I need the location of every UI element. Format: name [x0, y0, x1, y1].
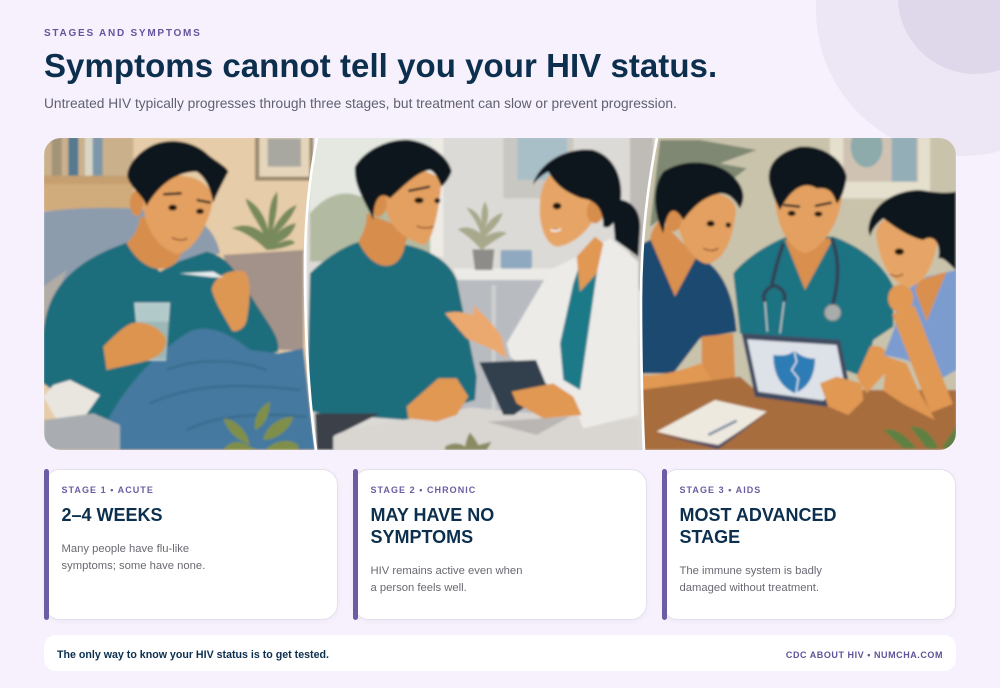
stage description: symptoms; some have none.	[62, 560, 205, 572]
scene: chronic stage, man talks with clinician	[307, 137, 657, 453]
stage description: Many people have flu-like	[62, 543, 189, 555]
kicker: STAGES AND SYMPTOMS	[44, 28, 202, 39]
card: stage 3	[662, 469, 956, 620]
accent bar	[662, 469, 667, 620]
stage description: damaged without treatment.	[680, 582, 819, 594]
stage heading: MAY HAVE NO	[370, 505, 494, 525]
accent bar	[44, 469, 49, 620]
subtitle: Untreated HIV typically progresses through three stages, but treatment can slow or prevent progression.	[44, 96, 677, 111]
sources: CDC ABOUT HIV • NUMCHA.COM	[786, 650, 943, 660]
title: Symptoms cannot tell you your HIV status.	[44, 47, 717, 84]
stage heading	[370, 505, 494, 547]
stage heading: MOST ADVANCED	[680, 505, 836, 525]
illustration: three stage scenes	[44, 138, 956, 450]
card: stage 1	[44, 469, 338, 620]
scene: AIDS stage, care team reviews tablet with cracked shield	[640, 126, 957, 453]
stage label: STAGE 1 • ACUTE	[62, 484, 154, 494]
stage description: a person feels well.	[370, 582, 467, 594]
stage heading: 2–4 WEEKS	[62, 505, 163, 525]
stage label: STAGE 3 • AIDS	[680, 484, 761, 494]
footer bar	[44, 635, 956, 671]
stage description	[62, 543, 205, 572]
stage description	[370, 565, 522, 594]
card: stage 2	[353, 469, 647, 620]
stage description	[680, 565, 822, 594]
accent bar	[353, 469, 358, 620]
key message: The only way to know your HIV status is to get tested.	[57, 649, 329, 661]
scene: acute stage, man sick in bed	[43, 137, 315, 453]
stage label: STAGE 2 • CHRONIC	[370, 484, 476, 494]
stage description: The immune system is badly	[680, 565, 822, 577]
stage description: HIV remains active even when	[370, 565, 522, 577]
stage heading	[680, 505, 836, 547]
stage heading: STAGE	[680, 527, 740, 547]
stage heading: SYMPTOMS	[370, 527, 473, 547]
